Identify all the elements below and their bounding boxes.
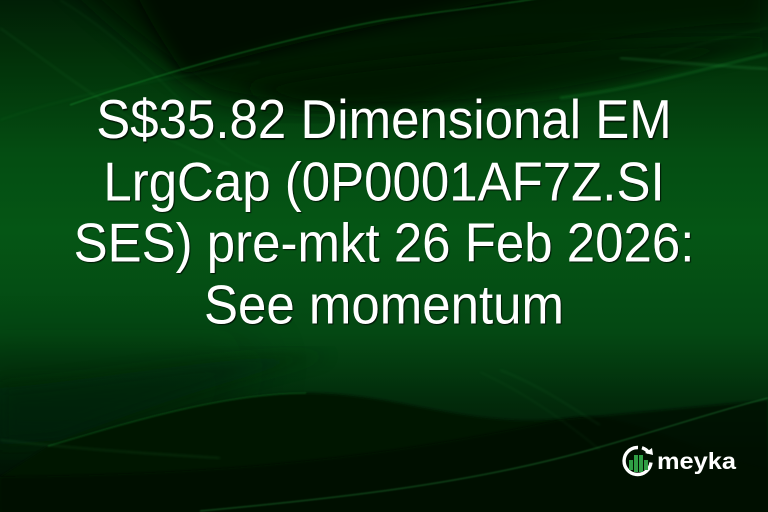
- title: SES) pre-mkt 26 Feb 2026:: [74, 212, 694, 273]
- title: See momentum: [204, 274, 564, 335]
- bottom dark shapes: [0, 355, 330, 445]
- icon: circular arrow with bars: [624, 447, 653, 474]
- title: LrgCap (0P0001AF7Z.SI: [103, 151, 665, 212]
- title: S$35.82 Dimensional EM: [96, 89, 672, 150]
- wordmark: meyka: [657, 448, 736, 474]
- top dark wedge: [60, 0, 768, 109]
- title: [74, 89, 694, 335]
- light streaks: [70, 0, 540, 105]
- logo: meyka: [622, 446, 736, 476]
